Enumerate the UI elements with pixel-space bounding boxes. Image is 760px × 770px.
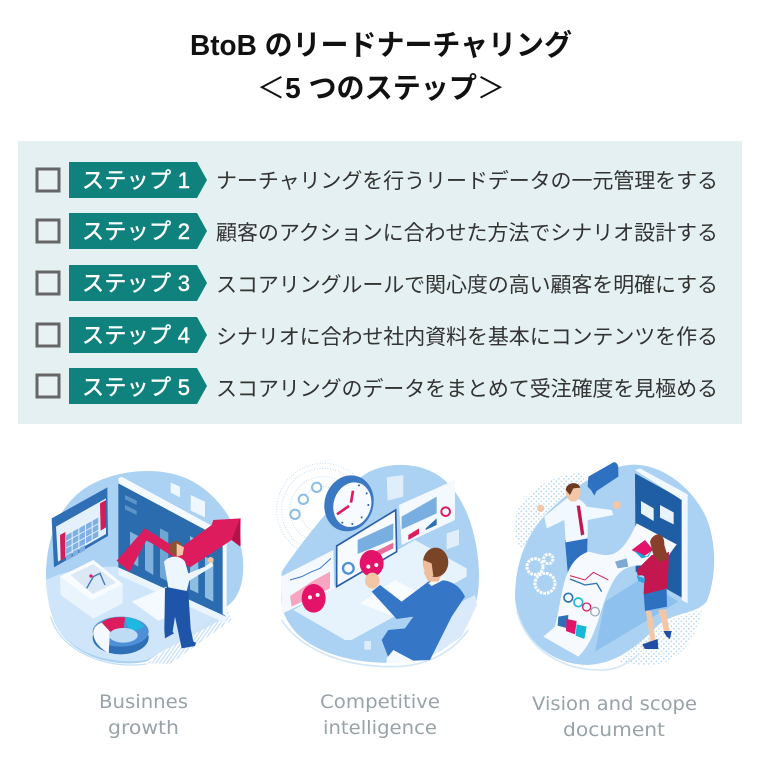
screen: dashboard <box>337 510 397 587</box>
paper on desk <box>360 580 420 615</box>
caption: business growth: growth <box>108 717 179 739</box>
paper stack <box>60 560 123 619</box>
title: BtoB のリードナーチャリング <box>190 29 572 62</box>
step 5 row: スコアリングのデータをまとめて受注確度を見極める <box>216 378 718 401</box>
step 4 row: シナリオに合わせ社内資料を基本にコンテンツを作る <box>216 326 718 349</box>
caption: business growth <box>99 691 188 739</box>
step 5 row: ステップ 5 <box>82 375 190 400</box>
businessman <box>365 548 465 662</box>
growth arrow <box>117 518 241 572</box>
chair <box>422 595 477 658</box>
screen: line chart <box>281 550 334 614</box>
man <box>537 483 621 580</box>
person <box>164 541 214 648</box>
title <box>190 29 572 105</box>
gears <box>527 554 555 593</box>
caption: business growth: Businnes <box>99 691 188 713</box>
step 2 row <box>37 213 718 249</box>
desk <box>293 540 467 640</box>
counter <box>595 578 678 652</box>
monitor <box>118 477 227 623</box>
illustration: vision and scope document <box>514 462 714 670</box>
caption: competitive intelligence: Competitive <box>320 691 440 713</box>
phone screen <box>635 468 688 603</box>
step 4 row: ステップ 4 <box>82 323 190 348</box>
woman <box>637 535 672 649</box>
calendar <box>52 487 108 567</box>
caption: vision and scope document: Vision and scope <box>532 693 697 715</box>
step 1 row: ステップ 1 <box>82 168 190 193</box>
step 1 row: ナーチャリングを行うリードデータの一元管理をする <box>216 170 718 193</box>
panel: five steps <box>18 141 742 424</box>
step 3 row <box>37 265 718 301</box>
step 1 row <box>37 162 718 198</box>
step 2 row: ステップ 2 <box>82 219 190 244</box>
step 3 row: ステップ 3 <box>82 271 190 296</box>
speech bubble <box>588 462 618 496</box>
step 2 row: 顧客のアクションに合わせた方法でシナリオ設計する <box>216 222 718 245</box>
screen: analytics <box>399 480 455 545</box>
step 3 row: スコアリングルールで関心度の高い顧客を明確にする <box>216 274 718 297</box>
illustration: business growth <box>46 471 243 665</box>
caption: competitive intelligence <box>320 691 440 739</box>
donut chart <box>93 617 149 654</box>
long report <box>543 523 677 657</box>
clock <box>317 469 381 538</box>
caption: vision and scope document: document <box>563 719 665 741</box>
caption: competitive intelligence: intelligence <box>323 717 437 739</box>
title: ＜5 つのステップ＞ <box>257 72 505 105</box>
step 5 row <box>37 368 718 404</box>
step 4 row <box>37 317 718 353</box>
caption: vision and scope document <box>532 693 697 741</box>
illustration: competitive intelligence <box>277 463 479 667</box>
